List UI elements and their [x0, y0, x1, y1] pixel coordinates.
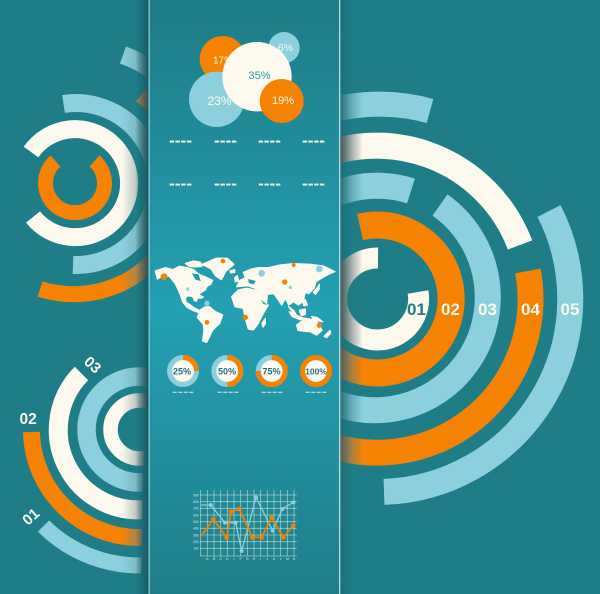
progress donuts: ---- — [172, 386, 194, 398]
line chart: A — [206, 557, 209, 561]
right panel shadow — [340, 0, 352, 594]
dashed placeholders: ---- — [169, 132, 192, 150]
left panel shadow — [136, 0, 149, 594]
line chart: 900 — [193, 493, 199, 497]
dashed placeholders: ---- — [214, 132, 237, 150]
line chart — [193, 490, 297, 561]
line chart: 700 — [193, 507, 199, 511]
dashed placeholders: ---- — [258, 132, 281, 150]
dashed placeholders: ---- — [169, 176, 192, 192]
progress donuts: ---- — [217, 386, 239, 398]
bottom-left concentric rings — [23, 366, 148, 574]
line chart: F — [240, 557, 242, 561]
line chart: K — [273, 557, 276, 561]
progress donuts: ---- — [305, 386, 327, 398]
line chart: 800 — [193, 500, 199, 504]
line chart: G — [246, 557, 249, 561]
bubble chart: 23% — [207, 94, 232, 108]
progress donuts: 25% — [173, 366, 191, 376]
progress donuts: 75% — [262, 366, 281, 376]
bubble chart: 6% — [278, 42, 293, 54]
right ring numbers: 01 — [407, 300, 426, 319]
label 02: 02 — [20, 411, 37, 428]
bubble chart: 35% — [248, 70, 271, 82]
right concentric rings — [300, 104, 570, 492]
line chart: B — [213, 557, 216, 561]
line chart: M — [286, 557, 289, 561]
line chart: L — [280, 557, 282, 561]
dashed placeholders: ---- — [258, 176, 281, 192]
line chart: 600 — [193, 513, 199, 517]
line chart: 400 — [193, 527, 199, 531]
right ring numbers: 04 — [521, 300, 540, 319]
right ring numbers: 05 — [561, 300, 579, 319]
dashed placeholders: ---- — [214, 176, 237, 192]
line chart: 200 — [193, 540, 199, 544]
panel edge left — [148, 0, 150, 594]
map markers — [161, 259, 323, 328]
line chart: 100 — [193, 547, 199, 551]
bubble chart: 17% — [213, 56, 233, 66]
right ring numbers: 02 — [441, 300, 460, 319]
right ring numbers — [407, 300, 579, 319]
line chart: 500 — [193, 520, 199, 524]
panel edge right — [339, 0, 340, 594]
line chart: J — [266, 557, 268, 561]
line chart: 300 — [193, 533, 199, 537]
line chart: C — [219, 557, 222, 561]
bubble chart — [189, 32, 304, 127]
progress donuts — [170, 358, 330, 398]
line chart: I — [234, 557, 235, 561]
line chart: H — [253, 557, 256, 561]
line chart: I — [260, 557, 261, 561]
dashed placeholders — [169, 132, 325, 192]
dashed placeholders: ---- — [302, 176, 325, 192]
dashed placeholders: ---- — [302, 132, 325, 150]
world map — [155, 258, 335, 342]
progress donuts: ---- — [261, 386, 283, 398]
label 01: 01 — [19, 505, 43, 529]
progress donuts: 100% — [305, 366, 327, 376]
central panel — [149, 0, 340, 594]
line chart: N — [293, 557, 296, 561]
progress donuts: 50% — [218, 366, 236, 376]
right ring numbers: 03 — [478, 300, 497, 319]
top-left concentric rings — [31, 55, 185, 294]
bubble chart: 19% — [272, 95, 294, 107]
label 03: 03 — [80, 353, 104, 377]
line chart: D — [226, 557, 229, 561]
